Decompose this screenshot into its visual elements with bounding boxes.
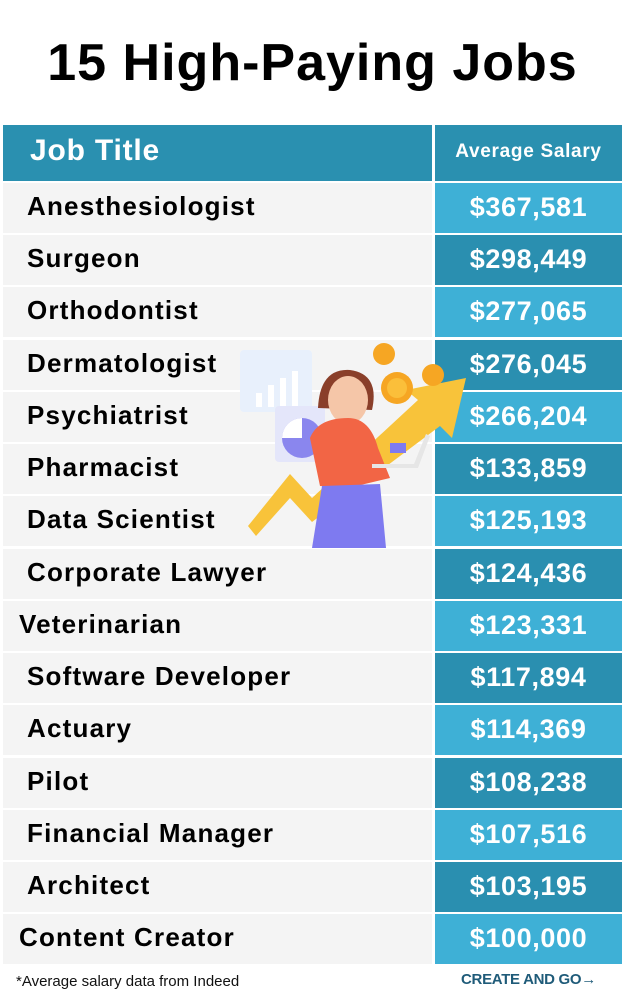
table rows: Surgeon xyxy=(27,243,141,273)
table rows: $108,238 xyxy=(470,767,587,797)
table rows xyxy=(3,183,622,964)
table rows: Pilot xyxy=(27,766,89,796)
table rows: Dermatologist xyxy=(27,348,217,378)
header: job title: Job Title xyxy=(30,134,160,167)
table rows: Financial Manager xyxy=(27,818,274,848)
table rows: Actuary xyxy=(27,713,132,743)
table rows: Content Creator xyxy=(19,922,235,952)
table rows: $266,204 xyxy=(470,401,587,431)
footnote: *Average salary data from Indeed xyxy=(16,973,239,990)
logo: create and go: CREATE AND GO→ xyxy=(461,971,596,988)
table rows: Psychiatrist xyxy=(27,400,189,430)
table rows: $124,436 xyxy=(470,558,587,588)
table rows: $100,000 xyxy=(470,923,587,953)
table rows: $276,045 xyxy=(470,349,587,379)
table rows: Data Scientist xyxy=(27,504,216,534)
table rows: $367,581 xyxy=(470,192,587,222)
table rows: Software Developer xyxy=(27,661,291,691)
table rows: $117,894 xyxy=(471,662,586,692)
header: job title xyxy=(3,125,432,181)
table rows: Architect xyxy=(27,870,150,900)
table rows: $103,195 xyxy=(470,871,587,901)
table rows: Corporate Lawyer xyxy=(27,557,267,587)
header: average salary: Average Salary xyxy=(455,141,602,162)
table rows: $114,369 xyxy=(471,714,586,744)
table header xyxy=(3,125,622,181)
table rows: $277,065 xyxy=(470,296,587,326)
header: average salary xyxy=(435,125,622,181)
table rows: Pharmacist xyxy=(27,452,179,482)
table rows: Orthodontist xyxy=(27,295,199,325)
title: 15 High-Paying Jobs xyxy=(47,34,578,92)
table rows: $123,331 xyxy=(470,610,587,640)
table rows: Anesthesiologist xyxy=(27,191,256,221)
table rows: $125,193 xyxy=(470,505,587,535)
table rows: $107,516 xyxy=(470,819,587,849)
table rows: $133,859 xyxy=(470,453,587,483)
illustration: woman with laptop, rising arrow and coins xyxy=(240,343,466,548)
table rows: Veterinarian xyxy=(19,609,182,639)
table rows: $298,449 xyxy=(470,244,587,274)
